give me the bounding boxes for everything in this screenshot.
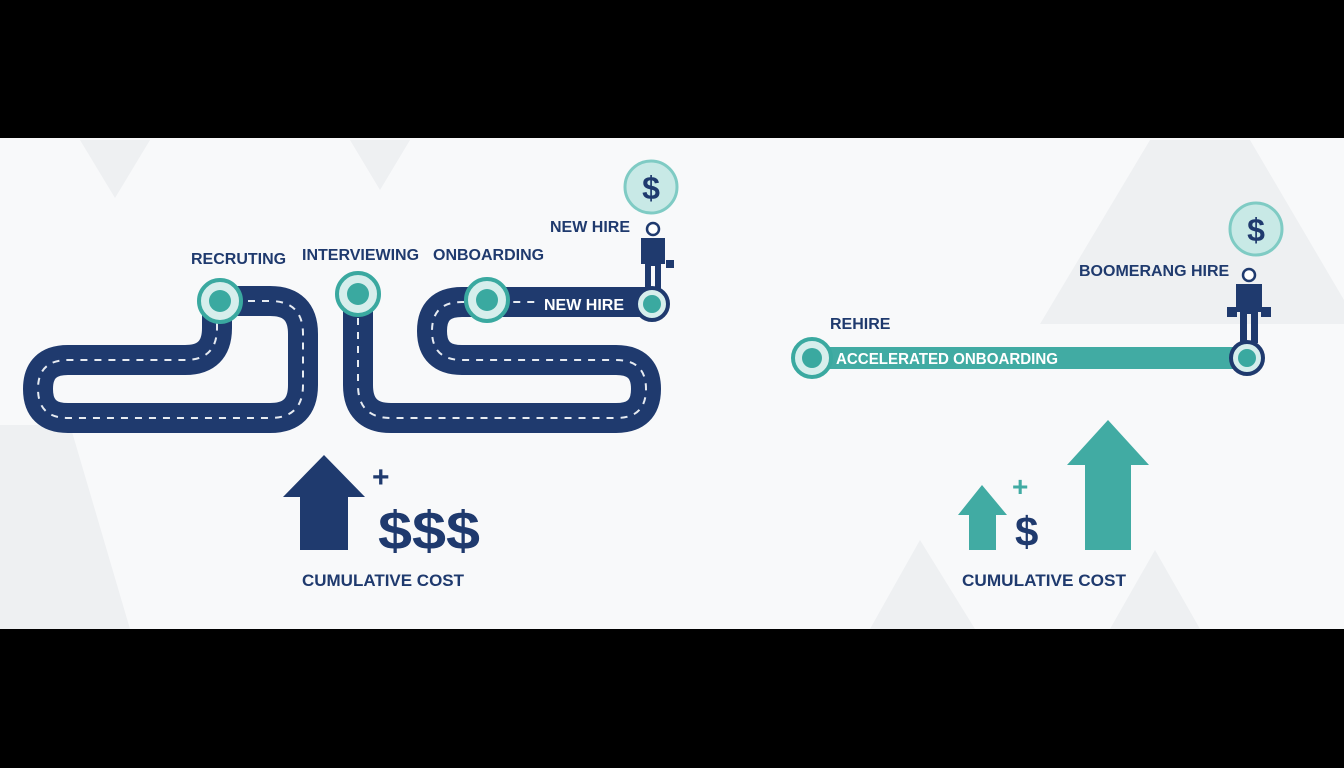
icon: person new hire bbox=[641, 223, 674, 290]
icon: dollar coin right: $ bbox=[1247, 212, 1265, 248]
labels right: BOOMERANG HIRE bbox=[1079, 263, 1230, 280]
node: recruiting bbox=[199, 280, 241, 322]
cost symbols right: $ bbox=[1015, 508, 1038, 555]
cost symbols left bbox=[372, 461, 480, 561]
stage labels: INTERVIEWING bbox=[302, 247, 419, 264]
stage labels: NEW HIRE bbox=[550, 219, 630, 236]
cost symbols right: + bbox=[1012, 471, 1028, 502]
icon: dollar coin left bbox=[625, 161, 677, 213]
label: cumulative cost right: CUMULATIVE COST bbox=[962, 571, 1127, 590]
cost symbols right bbox=[1012, 471, 1038, 555]
accelerated onboarding bar bbox=[810, 347, 1247, 369]
accelerated onboarding bar: ACCELERATED ONBOARDING bbox=[836, 351, 1058, 368]
cost symbols left: $$$ bbox=[378, 501, 480, 561]
label: cumulative cost left: CUMULATIVE COST bbox=[302, 571, 465, 590]
node: rehire bbox=[793, 339, 831, 377]
stage labels: RECRUTING bbox=[191, 251, 286, 268]
node: interviewing bbox=[337, 273, 379, 315]
labels right bbox=[830, 263, 1230, 333]
decorative background triangles bbox=[0, 140, 1344, 629]
big teal arrow bbox=[1067, 420, 1149, 550]
node: onboarding bbox=[466, 279, 508, 321]
small teal arrow bbox=[958, 485, 1007, 550]
cost arrow left bbox=[283, 455, 365, 550]
node: boomerang end bbox=[1231, 342, 1263, 374]
icon: dollar coin left: $ bbox=[642, 170, 660, 206]
stage labels bbox=[191, 219, 630, 268]
road label: new hire: NEW HIRE bbox=[544, 297, 624, 314]
icon: person boomerang bbox=[1227, 269, 1271, 343]
icon: dollar coin right bbox=[1230, 203, 1282, 255]
road: traditional hiring path bbox=[38, 294, 652, 418]
labels right: REHIRE bbox=[830, 316, 891, 333]
node: new hire end bbox=[636, 288, 668, 320]
cost symbols left: + bbox=[372, 461, 390, 494]
stage labels: ONBOARDING bbox=[433, 247, 544, 264]
